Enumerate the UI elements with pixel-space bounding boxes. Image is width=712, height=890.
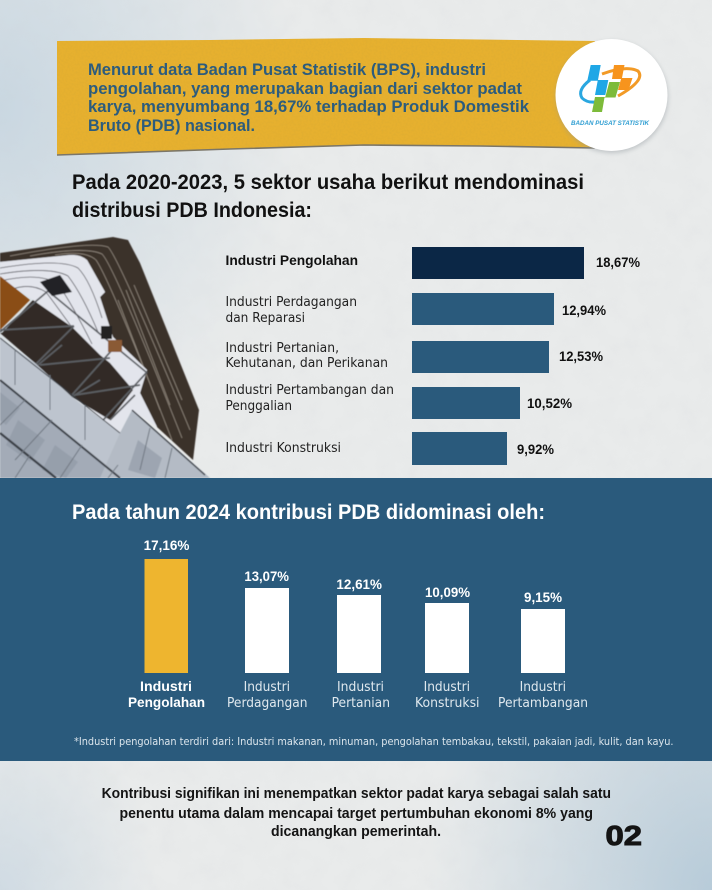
row: Industri Perdagangan: 12,94% bbox=[562, 303, 606, 318]
workers on the scaffold bbox=[40, 275, 122, 352]
banner text: Bruto (PDB) nasional. bbox=[88, 116, 255, 135]
banner text bbox=[88, 60, 530, 135]
logo caption: BADAN PUSAT STATISTIK bbox=[571, 120, 650, 127]
row: Industri Perdagangan: Industri Perdagangan bbox=[226, 295, 357, 310]
bar chart: sectors 2020-2023 bbox=[226, 247, 640, 465]
column: Industri Pertambangan: Pertambangan bbox=[498, 696, 588, 711]
page number: 02 bbox=[606, 820, 642, 851]
footnote: *Industri pengolahan terdiri dari: Industri makanan, minuman, pengolahan tembakau, tekstil, pakaian jadi, kulit, dan kayu. bbox=[74, 736, 674, 748]
banner text: Menurut data Badan Pusat Statistik (BPS), industri bbox=[88, 60, 486, 79]
closing statement: penentu utama dalam mencapai target pertumbuhan ekonomi 8% yang bbox=[120, 806, 593, 822]
closing statement: dicanangkan pemerintah. bbox=[271, 824, 441, 840]
row: Industri Konstruksi bbox=[226, 432, 554, 465]
row: Industri Pertambangan: Industri Pertambangan dan bbox=[226, 383, 394, 398]
banner: yellow torn paper intro bbox=[57, 38, 597, 156]
row: Industri Pengolahan bbox=[226, 247, 640, 279]
banner text: karya, menyumbang 18,67% terhadap Produk Domestik bbox=[88, 97, 530, 116]
column: Industri Perdagangan: 13,07% bbox=[244, 569, 289, 584]
heading: 2020-2023: distribusi PDB Indonesia: bbox=[72, 198, 312, 222]
icon: BPS green block bbox=[592, 82, 620, 112]
icon: BPS blue block bbox=[587, 65, 608, 95]
column: Industri Pertanian: Industri bbox=[337, 680, 384, 695]
column: Industri Konstruksi: Industri bbox=[424, 680, 470, 695]
row: Industri Pertambangan: 10,52% bbox=[527, 396, 572, 411]
column: Industri Perdagangan bbox=[227, 569, 308, 711]
outer brown cladding bbox=[0, 237, 199, 460]
banner text: pengolahan, yang merupakan bagian dari sektor padat bbox=[88, 79, 522, 98]
column: Industri Konstruksi: 10,09% bbox=[425, 585, 470, 600]
glass curtain wall bbox=[0, 340, 120, 465]
dark recessed floor bbox=[0, 300, 133, 420]
row: Industri Pertambangan: Penggalian bbox=[226, 399, 292, 414]
column: Industri Pengolahan: 17,16% bbox=[144, 538, 189, 553]
logo: Badan Pusat Statistik bbox=[556, 39, 668, 153]
row: Industri Pertanian: Industri Pertanian, bbox=[226, 341, 339, 356]
column: Industri Pertanian: 12,61% bbox=[336, 577, 382, 592]
column: Industri Konstruksi bbox=[415, 585, 480, 711]
white curved facade bbox=[0, 255, 157, 433]
column: Industri Perdagangan: Industri bbox=[244, 680, 290, 695]
column: Industri Pertanian: Pertanian bbox=[332, 696, 390, 711]
row: Industri Pengolahan: 18,67% bbox=[596, 255, 640, 270]
scaffold bbox=[0, 290, 148, 421]
icon: BPS swoosh bbox=[602, 69, 640, 96]
column: Industri Pertambangan: 9,15% bbox=[524, 590, 562, 605]
photo: building facade bbox=[0, 237, 210, 478]
heading: 2020-2023: Pada 2020-2023, 5 sektor usaha berikut mendominasi bbox=[72, 170, 584, 194]
icon: BPS orange block bbox=[612, 65, 632, 90]
heading: 2020-2023 bbox=[72, 170, 584, 222]
row: Industri Pertanian: 12,53% bbox=[559, 349, 603, 364]
panel heading: Pada tahun 2024 kontribusi PDB didominasi oleh: bbox=[72, 501, 545, 524]
closing statement bbox=[102, 786, 611, 840]
row: Industri Perdagangan: dan Reparasi bbox=[226, 311, 305, 326]
wood panel bbox=[0, 276, 30, 330]
column: Industri Pertambangan: Industri bbox=[520, 680, 566, 695]
column: Industri Pengolahan bbox=[128, 538, 205, 710]
column: Industri Pertambangan bbox=[498, 590, 588, 711]
column: Industri Pertanian bbox=[332, 577, 390, 711]
column: Industri Perdagangan: Perdagangan bbox=[227, 696, 308, 711]
row: Industri Perdagangan bbox=[226, 293, 606, 326]
column: Industri Pengolahan: Industri bbox=[140, 678, 192, 694]
row: Industri Pengolahan: Industri Pengolahan bbox=[226, 253, 358, 268]
column: Industri Pengolahan: Pengolahan bbox=[128, 694, 205, 710]
row: Industri Konstruksi: 9,92% bbox=[517, 442, 554, 457]
row: Industri Pertambangan bbox=[226, 383, 572, 419]
panel: 2024 contribution bbox=[0, 478, 712, 761]
row: Industri Pertanian: Kehutanan, dan Perikanan bbox=[226, 356, 388, 371]
closing statement: Kontribusi signifikan ini menempatkan sektor padat karya sebagai salah satu bbox=[102, 786, 611, 802]
row: Industri Konstruksi: Industri Konstruksi bbox=[226, 441, 341, 456]
column: Industri Konstruksi: Konstruksi bbox=[415, 696, 480, 711]
row: Industri Pertanian bbox=[226, 341, 603, 373]
